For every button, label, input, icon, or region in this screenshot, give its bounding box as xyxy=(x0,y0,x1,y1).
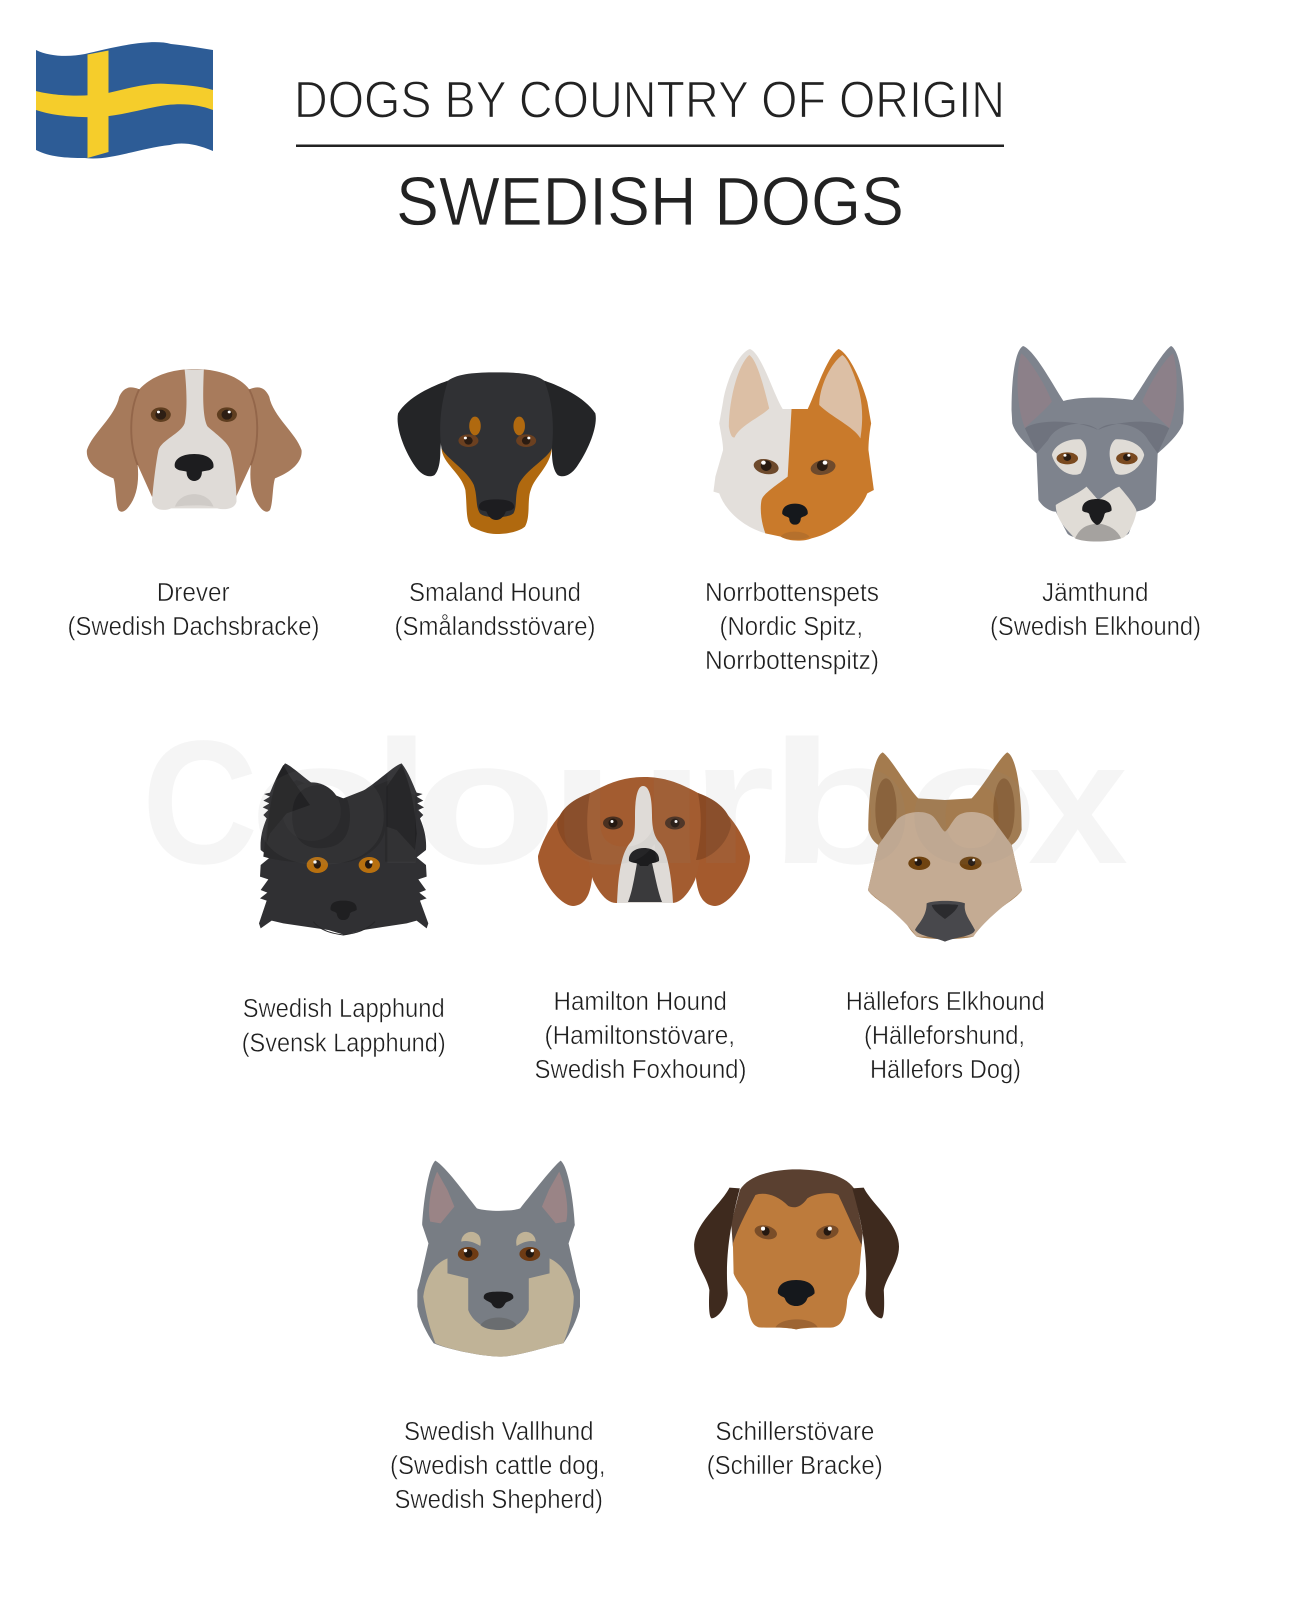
label: Hällefors Elkhound xyxy=(846,988,1045,1084)
label: Jämthund: (Swedish Elkhound) xyxy=(990,613,1201,641)
icon: Schillerstövare face xyxy=(694,1169,899,1329)
watermark: Colourbox xyxy=(142,705,1128,901)
label: Schillerstövare: Schillerstövare xyxy=(715,1418,874,1446)
label: Hamilton Hound: (Hamiltonstövare, xyxy=(544,1022,735,1050)
label: Swedish Lapphund: (Svensk Lapphund) xyxy=(242,1030,446,1058)
label: Hällefors Elkhound: (Hälleforshund, xyxy=(864,1022,1025,1050)
label: Norrbottenspets: Norrbottenspitz) xyxy=(705,647,879,675)
icon: Drever face xyxy=(87,369,302,512)
label: Hamilton Hound: Swedish Foxhound) xyxy=(534,1056,746,1084)
label: Jämthund xyxy=(990,579,1201,641)
panel: Norrbottenspets xyxy=(705,349,879,675)
label: Schillerstövare: (Schiller Bracke) xyxy=(707,1452,883,1480)
label: Swedish Vallhund: Swedish Shepherd) xyxy=(394,1486,603,1514)
watermark: Colourbox: r xyxy=(691,705,775,901)
label: Hamilton Hound: Hamilton Hound xyxy=(554,988,727,1016)
label: Swedish Vallhund: (Swedish cattle dog, xyxy=(390,1452,606,1480)
heading: Swedish dogs: SWEDISH DOGS xyxy=(396,163,904,240)
label: Drever: (Swedish Dachsbracke) xyxy=(68,613,320,641)
panel: Swedish Lapphund xyxy=(242,763,446,1058)
icon: Hällefors Elkhound face xyxy=(868,752,1022,942)
panel: Smaland Hound xyxy=(394,372,596,641)
panel: Hamilton Hound xyxy=(534,777,750,1084)
watermark: Colourbox: C xyxy=(142,705,258,901)
label: Smaland Hound: Smaland Hound xyxy=(409,579,581,607)
panel: Schillerstövare xyxy=(694,1169,899,1480)
panel: Jämthund xyxy=(990,346,1201,641)
label: Hällefors Elkhound: Hällefors Dog) xyxy=(870,1056,1021,1084)
label: Smaland Hound xyxy=(394,579,596,641)
watermark: Colourbox: o xyxy=(413,705,557,901)
watermark: Colourbox: o xyxy=(906,705,1038,901)
title: dogs by country of origin: DOGS BY COUNTRY OF ORIGIN xyxy=(294,72,1005,130)
watermark: Colourbox: b xyxy=(769,705,915,901)
label: Swedish Vallhund: Swedish Vallhund xyxy=(404,1418,594,1446)
panel: Swedish Vallhund xyxy=(390,1161,606,1514)
icon: Jämthund face xyxy=(1012,346,1184,542)
label: Norrbottenspets: Norrbottenspets xyxy=(705,579,879,607)
label: Smaland Hound: (Smålandsstövare) xyxy=(394,613,596,641)
label: Hamilton Hound xyxy=(534,988,746,1084)
label: Drever: Drever xyxy=(157,579,230,607)
label: Norrbottenspets xyxy=(705,579,879,675)
panel: Drever xyxy=(68,369,320,641)
icon: Hamilton Hound face xyxy=(538,777,750,906)
label: Swedish Vallhund xyxy=(390,1418,606,1514)
icon: Swedish flag xyxy=(36,42,213,158)
label: Jämthund: Jämthund xyxy=(1042,579,1148,607)
label: Schillerstövare xyxy=(707,1418,883,1480)
label: Hällefors Elkhound: Hällefors Elkhound xyxy=(846,988,1045,1016)
watermark: Colourbox: u xyxy=(548,705,708,901)
label: Drever xyxy=(68,579,320,641)
icon: Norrbottenspets face xyxy=(713,349,874,541)
label: Swedish Lapphund xyxy=(242,995,446,1058)
watermark: Colourbox: x xyxy=(1028,705,1128,901)
label: Norrbottenspets: (Nordic Spitz, xyxy=(720,613,863,641)
icon: Smaland Hound face xyxy=(398,372,596,534)
panel: Hällefors Elkhound xyxy=(846,752,1045,1084)
icon: Swedish Lapphund face xyxy=(259,763,428,935)
label: Swedish Lapphund: Swedish Lapphund xyxy=(243,995,445,1023)
icon: Swedish Vallhund face xyxy=(417,1161,580,1357)
watermark: Colourbox: o xyxy=(249,705,393,901)
watermark: Colourbox: l xyxy=(373,705,430,901)
